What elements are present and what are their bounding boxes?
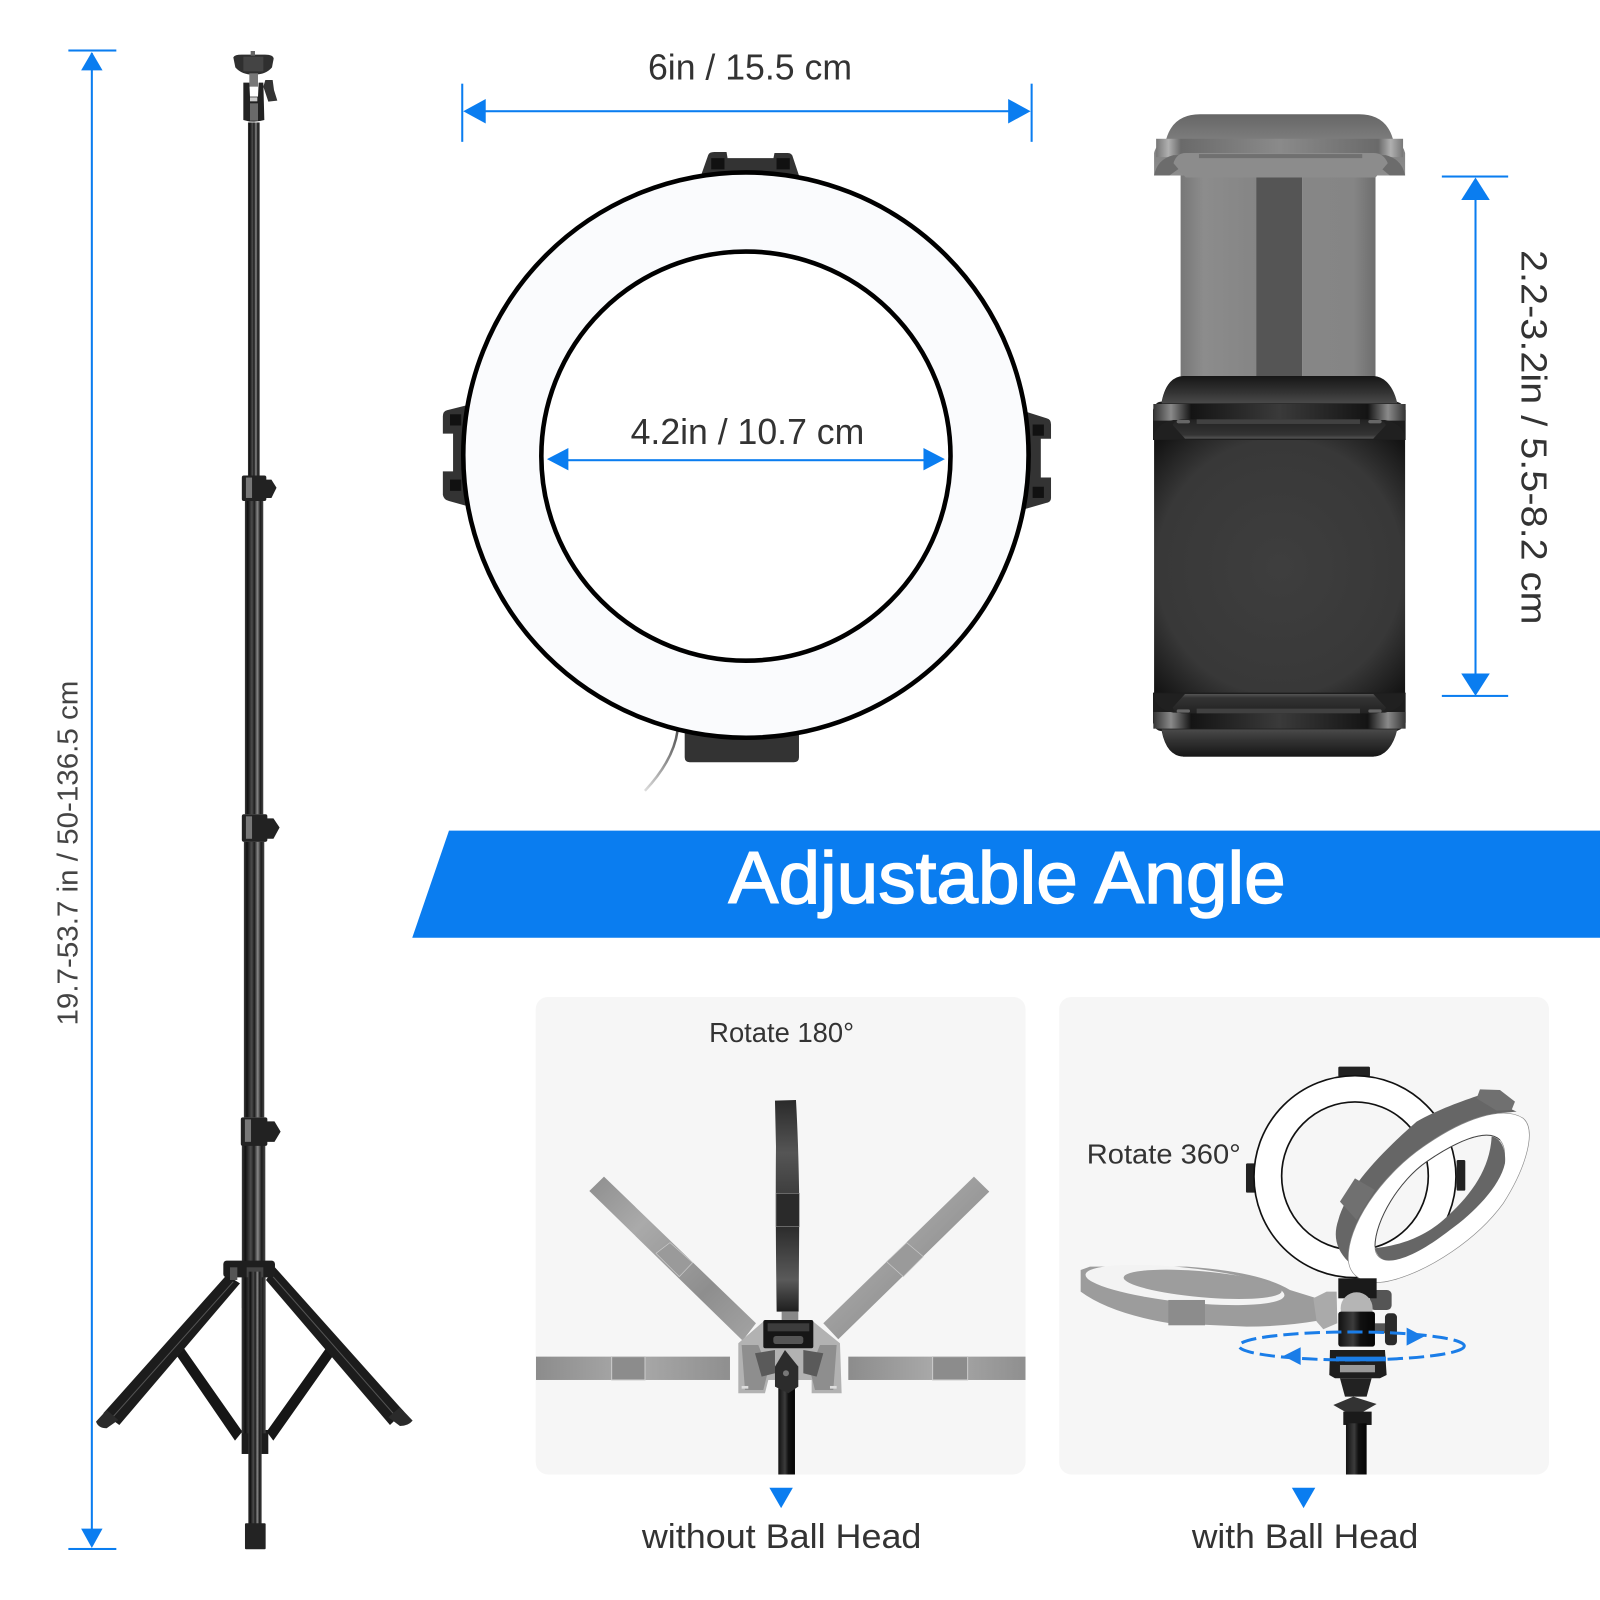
flat ring bbox=[1080, 1266, 1338, 1330]
banner: Adjustable Angle bbox=[412, 831, 1600, 938]
holder top jaw bbox=[1153, 376, 1406, 440]
caption marker: without ball head bbox=[769, 1488, 793, 1508]
ring face bbox=[463, 172, 1029, 738]
swivel hub bbox=[738, 1320, 842, 1393]
banner title: Adjustable Angle bbox=[729, 836, 1286, 919]
tripod legs, hub and foot bbox=[96, 1261, 413, 1549]
pole clamps bbox=[241, 476, 281, 1146]
caption: with ball head: with Ball Head bbox=[1191, 1518, 1418, 1556]
tripod top mount bbox=[233, 51, 277, 122]
rings on ball head bbox=[1081, 1067, 1529, 1477]
inner diameter arrow bbox=[547, 448, 945, 470]
holder main body bbox=[1153, 376, 1406, 757]
phone holder bbox=[1153, 114, 1406, 757]
panel: with ball head bbox=[1059, 997, 1549, 1477]
tilted ring bbox=[1336, 1089, 1529, 1282]
ring mounting tabs bbox=[443, 152, 1051, 762]
ring at five tilt positions bbox=[536, 1100, 1026, 1476]
panel: without ball head bbox=[536, 997, 1026, 1476]
holder upper clamp bbox=[1154, 114, 1405, 178]
caption: without ball head: without Ball Head bbox=[641, 1518, 921, 1556]
phone range label: 2.2-3.2in / 5.5-8.2 cm bbox=[1513, 250, 1553, 624]
ring width label: 6in / 15.5 cm bbox=[648, 48, 852, 88]
holder bottom jaw bbox=[1153, 693, 1406, 757]
caption marker: with ball head bbox=[1292, 1488, 1315, 1508]
ring width dimension: arrow line bbox=[461, 84, 1033, 142]
ring light bbox=[443, 152, 1051, 791]
height dimension: arrow line bbox=[68, 49, 116, 1550]
blue rotation arrows bbox=[1239, 1328, 1464, 1365]
power cable bbox=[645, 731, 678, 791]
rotate 360 label: Rotate 360° bbox=[1087, 1138, 1241, 1169]
pole sections bbox=[242, 122, 265, 1308]
tripod stand bbox=[96, 51, 413, 1549]
height dimension label: 19.7-53.7 in / 50-136.5 cm bbox=[53, 681, 85, 1026]
rotate 180 label: Rotate 180° bbox=[709, 1017, 854, 1048]
phone range dimension arrow bbox=[1442, 176, 1508, 697]
inner diameter label: 4.2in / 10.7 cm bbox=[631, 412, 864, 452]
holder sliding arms bbox=[1181, 173, 1376, 378]
